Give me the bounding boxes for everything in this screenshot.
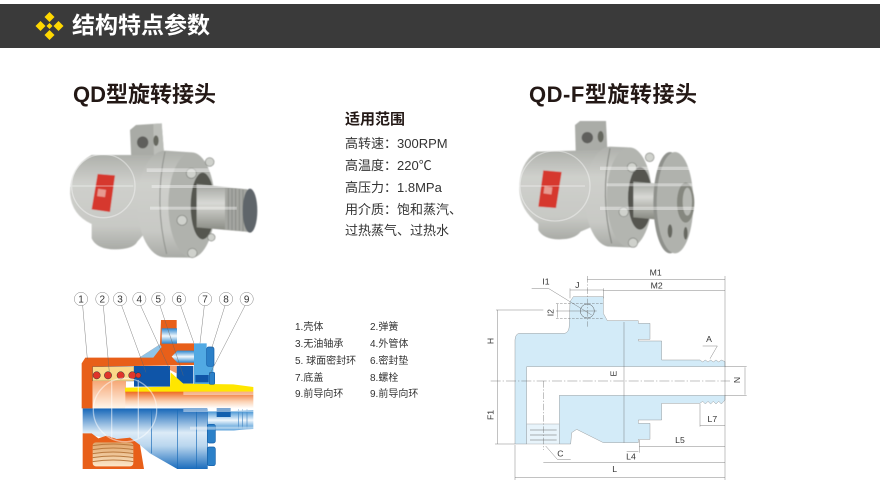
number callouts: [74, 292, 253, 306]
watermark: [93, 378, 157, 442]
dimension labels: M1: [650, 267, 662, 277]
panel: application range: [345, 111, 462, 238]
parts legend: 8.螺栓: [370, 371, 398, 384]
orange upper housing: [82, 320, 194, 408]
dimension labels: L4: [626, 451, 636, 461]
cross-section diagram: 3: [117, 295, 123, 306]
dimension labels: L7: [708, 414, 717, 424]
cross-section diagram: 9: [244, 295, 250, 306]
cross-section diagram: 2: [100, 295, 106, 306]
parts legend: 5. 球面密封环: [295, 354, 356, 367]
parts legend: 7.底盖: [295, 371, 323, 384]
parts legend: 6.密封垫: [370, 354, 408, 367]
body outline: [515, 297, 725, 444]
cross-section diagram: 1: [78, 295, 84, 306]
parts legend: 4.外管体: [370, 337, 408, 350]
heading: QD-F: QD-F型旋转接头: [529, 82, 697, 107]
dimension labels: [485, 267, 742, 474]
dimension labels: F1: [485, 410, 495, 420]
spring balls: [93, 372, 141, 379]
parts legend: 3.无油轴承: [295, 337, 343, 350]
leader lines: [83, 306, 245, 376]
spec lines: 高压力：1.8MPa: [345, 180, 443, 195]
dimension labels: J: [575, 280, 579, 290]
bolts: [207, 347, 215, 384]
lower half blue body: [83, 408, 207, 469]
bearing and blue parts: [134, 366, 170, 387]
dimension labels: H: [485, 338, 495, 344]
spec lines: [345, 136, 462, 238]
range heading: 适用范围: [345, 111, 405, 128]
orange port: [83, 433, 144, 469]
parts legend: 2.弹簧: [370, 320, 398, 333]
icon: yellow diamonds: [36, 12, 64, 40]
dimension drawing: [485, 267, 747, 480]
parts legend: 9.前导向环: [295, 387, 343, 400]
parts legend: 9.前导向环: [370, 387, 418, 400]
yellow shaft: [125, 372, 253, 392]
photo: QD-F rotary joint: [518, 121, 703, 253]
dimension labels: M2: [651, 281, 663, 291]
parts legend: 1.壳体: [295, 320, 323, 333]
dimension labels: I1: [542, 277, 550, 287]
parts legend: [295, 320, 418, 400]
watermark: [67, 154, 248, 218]
cross-section diagram: 4: [137, 295, 143, 306]
heading: QD: QD型旋转接头: [73, 82, 216, 107]
watermark: [518, 151, 703, 221]
cross-section diagram: 5: [156, 295, 162, 306]
dimension labels: I2: [545, 309, 555, 316]
spring chamber: [93, 367, 134, 381]
cross-section diagram: [74, 292, 277, 469]
dimension labels: A: [706, 334, 712, 344]
photo: QD rotary joint: [67, 123, 257, 258]
header title: 结构特点参数: [72, 12, 210, 38]
cross-section diagram: 6: [176, 295, 182, 306]
dimension labels: N: [732, 377, 742, 383]
header bar: [0, 4, 880, 48]
dimension labels: L: [612, 464, 617, 474]
dimension labels: C: [557, 449, 563, 459]
spec lines: 高转速：300RPM: [345, 136, 448, 151]
dimension labels: E: [609, 371, 619, 377]
spec lines: 用介质：饱和蒸汽、: [345, 202, 462, 217]
cross-section diagram: 8: [223, 295, 229, 306]
dimension labels: L5: [675, 435, 685, 445]
port circle and lines: [580, 304, 594, 318]
spec lines: 过热蒸气、过热水: [345, 223, 449, 238]
cross-section diagram: 7: [202, 295, 208, 306]
spec lines: 高温度：220℃: [345, 158, 432, 173]
